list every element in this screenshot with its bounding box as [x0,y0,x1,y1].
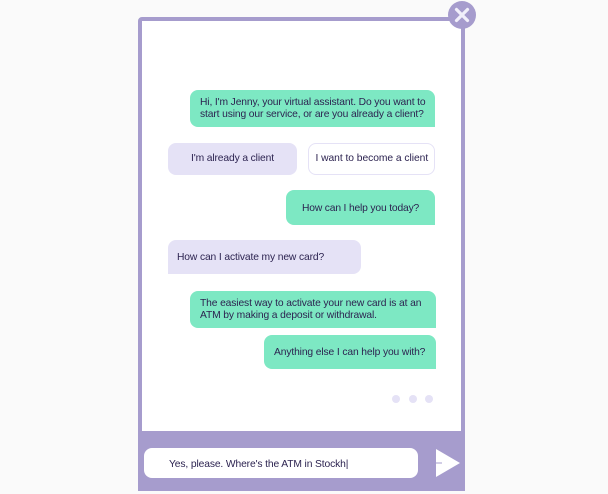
user question bubble [168,240,361,274]
user question bubble: How can I activate my new card? [177,252,324,262]
option: become a client: I want to become a client [316,152,428,164]
message input field: Yes, please. Where's the ATM in Stockh| [169,458,348,470]
assistant greeting bubble: start using our service, or are you already a client? [200,109,424,120]
assistant follow-up bubble: Anything else I can help you with? [274,346,425,358]
input bar [138,431,465,491]
typing indicator dots [392,395,433,403]
assistant answer bubble: ATM by making a deposit or withdrawal. [200,310,377,321]
option: become a client [308,143,435,175]
assistant question bubble: How can I help you today? [302,202,419,214]
chat window frame [138,17,465,491]
assistant greeting bubble [190,90,435,127]
option: already a client: I'm already a client [191,153,274,164]
assistant question bubble [286,190,435,225]
message input field [144,448,418,478]
assistant answer bubble [190,291,436,328]
assistant greeting bubble: Hi, I'm Jenny, your virtual assistant. Do you want to [200,96,426,108]
send arrow icon [436,449,460,477]
assistant answer bubble: The easiest way to activate your new card is at an [200,298,421,308]
close button [448,1,476,29]
option: already a client [168,143,297,175]
assistant follow-up bubble [264,335,436,369]
